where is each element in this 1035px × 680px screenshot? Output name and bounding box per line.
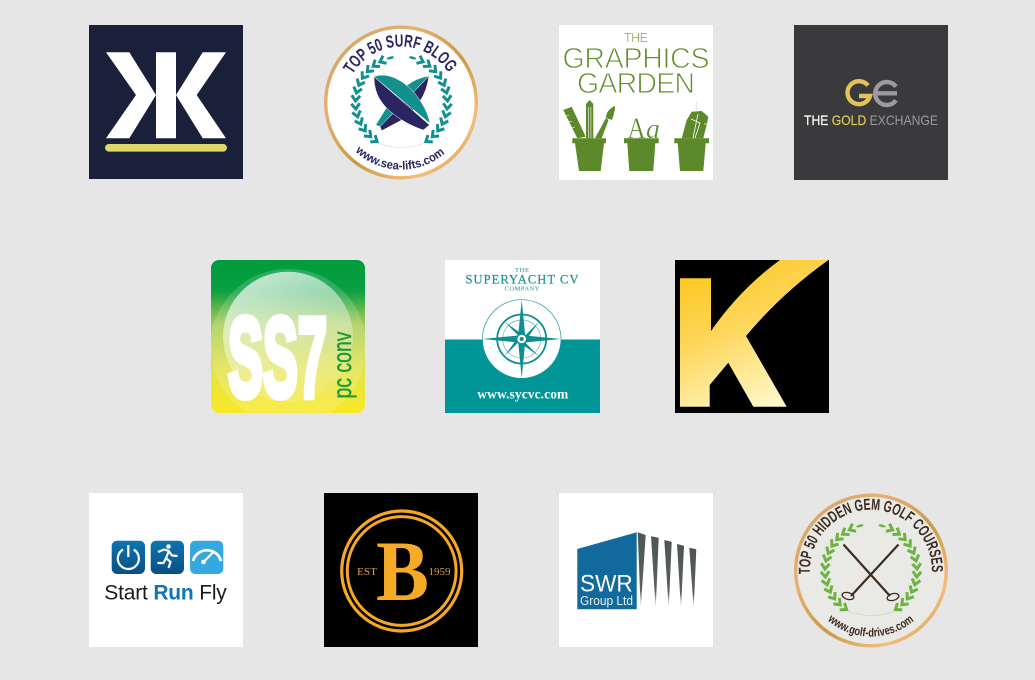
- B letter: B: [376, 523, 429, 619]
- navy tile: [89, 25, 243, 179]
- url: www.sycvc.com: [477, 386, 569, 402]
- pot: Aa letters: a: [646, 114, 660, 145]
- logo: gold K: [675, 260, 829, 413]
- logo: SS7 pc conv: [210, 260, 366, 425]
- gold ring: [326, 27, 476, 178]
- white tile: [559, 25, 713, 180]
- KK letterform: [106, 52, 226, 138]
- logo: B est 1959: [324, 493, 478, 647]
- logo: Top 50 Hidden Gem Golf Courses badge: [794, 494, 948, 648]
- wordmark: THE GOLD EXCHANGE: [804, 112, 938, 128]
- badge title: TOP 50 HIDDEN GEM GOLF COURSES: [798, 498, 943, 574]
- gradient tile: [211, 260, 365, 413]
- white tile: [89, 493, 243, 647]
- wordmark: GARDEN: [577, 68, 695, 100]
- pot: cactus: [674, 102, 709, 171]
- glass bubbles: [210, 269, 366, 425]
- 1959 label: 1959: [428, 566, 451, 578]
- surfboards: [374, 75, 430, 131]
- icon: runner: [151, 541, 184, 574]
- EST label: EST: [357, 566, 377, 578]
- logo: The Superyacht CV Company: [445, 260, 600, 413]
- badge url: www.sea-lifts.com: [356, 146, 444, 170]
- pot: Aa letters: [624, 112, 660, 171]
- black tile: [324, 493, 478, 647]
- laurel wreath: [821, 524, 921, 616]
- compass: [482, 300, 561, 378]
- logo: KK monogram: [89, 25, 243, 179]
- white tile: [445, 260, 600, 413]
- teal band: [445, 340, 600, 413]
- SWR text: SWR: [580, 570, 633, 598]
- company name: SUPERYACHT CV: [466, 272, 578, 286]
- company name: THE: [515, 267, 529, 274]
- company name: COMPANY: [504, 286, 540, 292]
- laurel wreath: [351, 56, 452, 147]
- wordmark: [562, 31, 710, 100]
- pot: ruler, pencil and brush: [563, 100, 615, 171]
- GE mark: [847, 81, 897, 105]
- logo: SWR Group Ltd: [559, 493, 713, 647]
- Group Ltd text: Group Ltd: [580, 593, 633, 608]
- wordmark: Start Run Fly: [104, 582, 227, 604]
- company name: [466, 267, 578, 292]
- icon: gauge: [190, 541, 223, 574]
- icon: power: [112, 541, 145, 574]
- pc conv lettering: pc conv: [327, 332, 357, 398]
- logo: Top 50 Surf Blog badge: [324, 26, 478, 180]
- logo: SS7 pc conv: SS7: [228, 294, 327, 420]
- badge title: TOP 50 SURF BLOG: [342, 34, 456, 72]
- logo: The Gold Exchange: [794, 25, 948, 180]
- building fins: [638, 532, 696, 609]
- logo: Start Run Fly: [89, 493, 243, 647]
- underline bar: [105, 144, 227, 152]
- wordmark: GRAPHICS: [562, 43, 710, 75]
- charcoal tile: [794, 25, 948, 180]
- crossed clubs: [841, 544, 900, 602]
- pot: Aa letters: A: [628, 112, 646, 145]
- badge url: www.golf-drives.com: [828, 615, 914, 637]
- K letterform: [680, 260, 828, 407]
- gold ring: [796, 495, 946, 646]
- blue building: [577, 532, 637, 609]
- white tile: [559, 493, 713, 647]
- logo grid: [89, 25, 948, 648]
- wordmark: THE: [624, 31, 648, 45]
- black tile: [675, 260, 829, 413]
- double ring: [342, 511, 462, 631]
- logo: The Graphics Garden: [559, 25, 713, 180]
